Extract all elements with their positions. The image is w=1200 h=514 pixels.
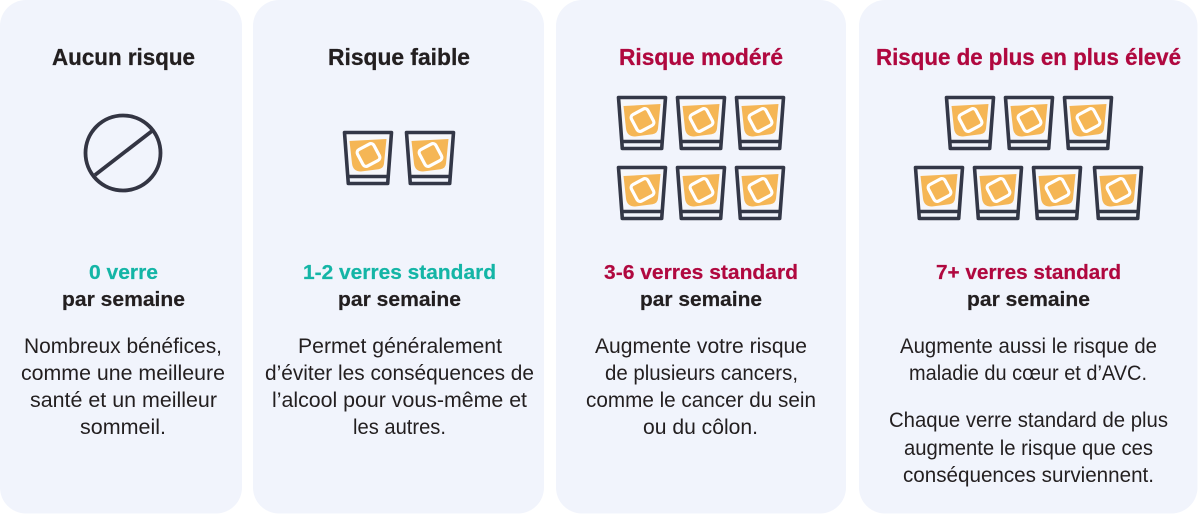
description: les autres. [353, 416, 446, 439]
description [889, 335, 1168, 487]
dose label: par semaine [967, 289, 1090, 311]
description: l’alcool pour vous-même et [272, 389, 527, 412]
panel: risque modéré [556, 0, 846, 514]
icon: no symbol [86, 116, 160, 190]
heading: risque faible: Risque faible [328, 44, 470, 70]
description [265, 335, 534, 439]
icon: seven glasses [916, 98, 1142, 218]
dose label: 0 verre [89, 262, 158, 284]
dose label: 7+ verres standard [936, 262, 1121, 284]
description: Nombreux bénéfices, [24, 335, 222, 358]
heading: risque modéré: Risque modéré [619, 44, 783, 70]
description: ou du côlon. [643, 416, 758, 439]
icon: six glasses [618, 98, 784, 218]
panel: aucun risque [0, 0, 242, 514]
heading: risque de plus en plus élevé: Risque de plus en plus élevé [876, 44, 1181, 70]
dose label: par semaine [338, 289, 461, 311]
dose label: par semaine [62, 289, 185, 311]
description: augmente le risque que ces [904, 437, 1153, 460]
dose label [62, 262, 185, 311]
dose label [303, 262, 496, 311]
description: comme une meilleure [21, 362, 225, 385]
dose label [936, 262, 1121, 311]
panel: risque faible [253, 0, 544, 514]
heading: aucun risque: Aucun risque [52, 44, 195, 70]
description: Augmente aussi le risque de [900, 335, 1157, 358]
description: Augmente votre risque [595, 335, 807, 358]
panel: risque de plus en plus élevé [859, 0, 1198, 514]
dose label: 3-6 verres standard [604, 262, 798, 284]
description: sommeil. [80, 416, 166, 439]
description: comme le cancer du sein [586, 389, 816, 412]
description: de plusieurs cancers, [605, 362, 798, 385]
description [586, 335, 816, 439]
dose label [604, 262, 798, 311]
description: santé et un meilleur [30, 389, 217, 412]
dose label: par semaine [640, 289, 762, 311]
description: Chaque verre standard de plus [889, 409, 1168, 432]
description [21, 335, 225, 439]
description: Permet généralement [298, 335, 502, 358]
icon: two glasses [344, 132, 454, 184]
description: d’éviter les conséquences de [265, 362, 534, 385]
dose label: 1-2 verres standard [303, 262, 496, 284]
description: conséquences surviennent. [903, 464, 1154, 487]
description: maladie du cœur et d’AVC. [909, 362, 1147, 385]
